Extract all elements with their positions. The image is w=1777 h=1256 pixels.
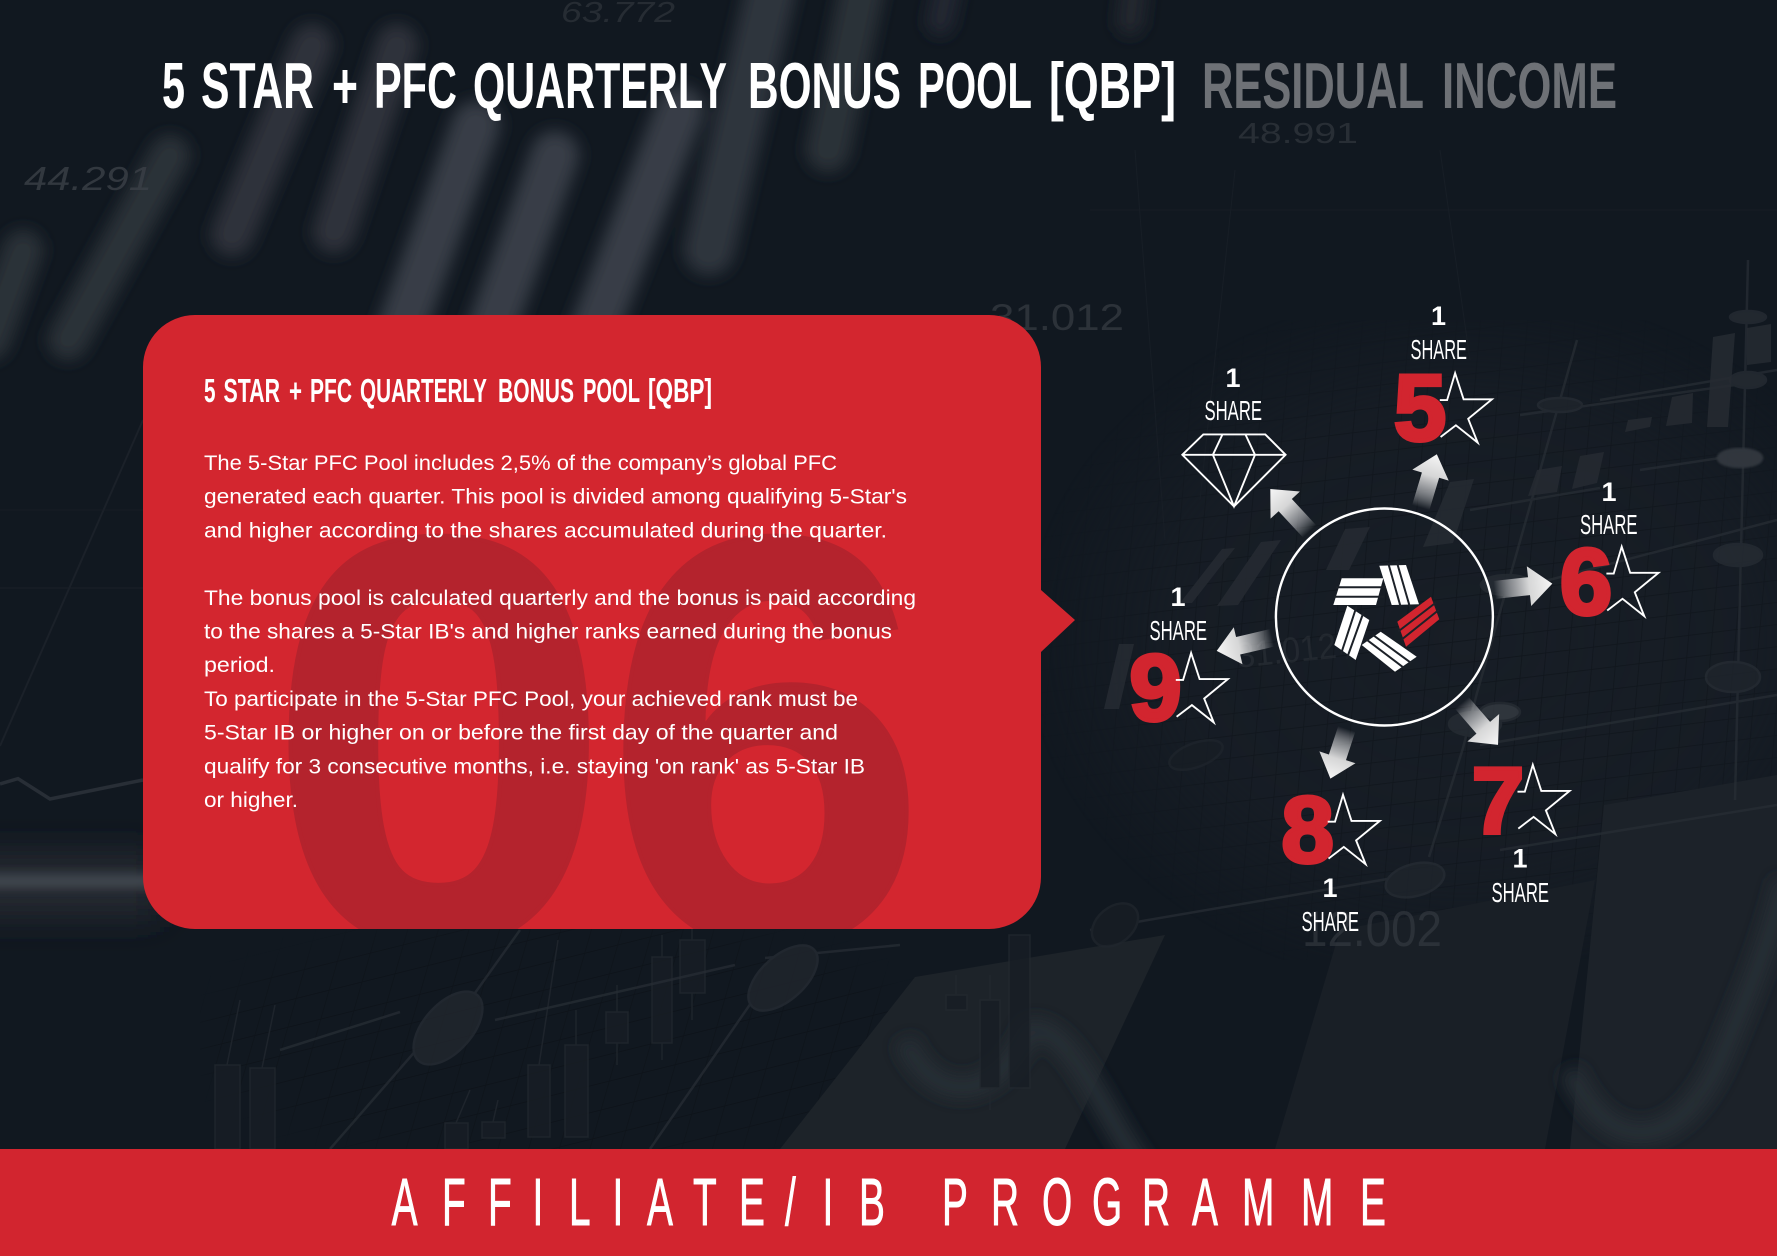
background: lower candlesticks bbox=[215, 915, 1030, 1149]
background: blurred candle bars bbox=[0, 0, 1134, 340]
background: chart lines and rings bbox=[0, 150, 1777, 1149]
panel body text: To participate in the 5-Star PFC Pool, your achieved rank must be bbox=[204, 688, 858, 711]
background: blurred wave bbox=[905, 880, 1777, 1170]
panel watermark number: 6 bbox=[604, 416, 928, 1066]
panel body text bbox=[204, 452, 916, 812]
panel heading: QUARTERLY bbox=[360, 372, 487, 409]
rank: 8 star 1 share: 8 bbox=[1281, 777, 1334, 882]
rank: 6 star 1 share: SHARE bbox=[1580, 509, 1638, 540]
rank: 9 star 1 share: 1 bbox=[1170, 582, 1186, 612]
background: left chart lines and glow bbox=[0, 420, 160, 915]
rank: 6 star 1 share bbox=[1560, 477, 1658, 634]
background: ghost numbers: 31.012 bbox=[1235, 625, 1338, 676]
panel heading: STAR bbox=[224, 372, 280, 409]
panel body text: qualify for 3 consecutive months, i.e. staying 'on rank' as 5-Star IB bbox=[204, 755, 865, 778]
title: PFC bbox=[374, 49, 457, 122]
arrow to 8 star bbox=[1312, 723, 1365, 785]
panel watermark number bbox=[288, 534, 909, 929]
rank: 9 star 1 share bbox=[1129, 582, 1228, 740]
rank: 7 star 1 share: SHARE bbox=[1492, 877, 1549, 908]
panel watermark number: 0 bbox=[266, 415, 612, 1066]
title: QUARTERLY bbox=[473, 49, 727, 122]
background: lower polygons bbox=[780, 775, 1777, 1149]
background: lower grid bbox=[200, 900, 960, 1150]
background: perspective candles bbox=[1104, 324, 1771, 709]
title: INCOME bbox=[1442, 49, 1617, 122]
background: ghost numbers: 12.002 bbox=[1302, 901, 1442, 957]
diagram: shares by rank bbox=[1129, 301, 1658, 937]
rank: diamond 1 share: SHARE bbox=[1204, 395, 1262, 426]
rank: 5 star 1 share: 5 bbox=[1394, 355, 1446, 460]
panel: bonus pool description bbox=[143, 315, 1075, 929]
rank: 5 star 1 share: SHARE bbox=[1410, 334, 1467, 365]
icon: diamond bbox=[1182, 434, 1286, 506]
rank: diamond 1 share: 1 bbox=[1225, 363, 1241, 393]
rank: 8 star 1 share bbox=[1281, 777, 1380, 937]
background: ghost numbers: 48.991 bbox=[1238, 118, 1358, 150]
arrow to 6 star bbox=[1492, 564, 1555, 610]
title: 5 bbox=[162, 49, 185, 122]
rank: 9 star 1 share: SHARE bbox=[1150, 615, 1207, 646]
background: ghost numbers bbox=[24, 0, 1442, 957]
rank: 5 star 1 share: 1 bbox=[1431, 301, 1446, 331]
background: ghost numbers: 31.012 bbox=[990, 297, 1124, 338]
title: STAR bbox=[201, 49, 314, 122]
rank: 7 star 1 share: 7 bbox=[1472, 748, 1524, 853]
background: ghost numbers: 44.291 bbox=[24, 160, 152, 197]
panel heading: BONUS bbox=[498, 372, 574, 409]
rank: 6 star 1 share: 6 bbox=[1560, 529, 1612, 634]
title: [QBP] bbox=[1049, 49, 1176, 122]
rank: diamond 1 share bbox=[1182, 363, 1286, 506]
rank: 8 star 1 share: SHARE bbox=[1302, 906, 1359, 937]
panel heading bbox=[204, 372, 712, 409]
background: perspective grid bbox=[1334, 530, 1595, 748]
rank: 7 star 1 share: 1 bbox=[1512, 844, 1528, 874]
background: lighter right area bbox=[1000, 320, 1777, 960]
panel body text: The 5-Star PFC Pool includes 2,5% of the company’s global PFC bbox=[204, 452, 837, 475]
rank: 8 star 1 share: 1 bbox=[1322, 873, 1338, 903]
title: RESIDUAL bbox=[1202, 49, 1424, 122]
panel body text: to the shares a 5-Star IB's and higher ranks earned during the bonus bbox=[204, 620, 892, 644]
panel body text: period. bbox=[204, 654, 275, 677]
footer text: AFFILIATE/IB PROGRAMME bbox=[392, 1164, 1386, 1240]
panel body text: 5-Star IB or higher on or before the first day of the quarter and bbox=[204, 722, 838, 745]
title bbox=[162, 49, 1617, 122]
panel heading: [QBP] bbox=[648, 372, 712, 409]
panel body text: or higher. bbox=[204, 789, 298, 812]
title: + bbox=[332, 49, 358, 122]
rank: 5 star 1 share bbox=[1394, 301, 1492, 460]
panel heading: PFC bbox=[310, 372, 352, 409]
title: POOL bbox=[918, 49, 1032, 122]
arrow to diamond bbox=[1256, 475, 1324, 545]
panel body text: and higher according to the shares accumulated during the quarter. bbox=[204, 519, 887, 542]
rank: 7 star 1 share bbox=[1472, 748, 1570, 908]
panel body text: generated each quarter. This pool is divided among qualifying 5-Star's bbox=[204, 486, 907, 509]
rank: 9 star 1 share: 9 bbox=[1129, 635, 1182, 740]
arrow to 7 star bbox=[1446, 689, 1514, 759]
rank: 6 star 1 share: 1 bbox=[1601, 477, 1617, 507]
panel heading: POOL bbox=[583, 372, 640, 409]
central circle bbox=[1276, 508, 1493, 726]
footer banner bbox=[0, 1149, 1777, 1256]
panel heading: 5 bbox=[204, 372, 216, 409]
arrow to 9 star bbox=[1212, 619, 1277, 669]
arrow to 5 star bbox=[1403, 449, 1455, 513]
panel heading: + bbox=[289, 372, 302, 409]
panel body text: The bonus pool is calculated quarterly and the bonus is paid according bbox=[204, 587, 916, 610]
title: BONUS bbox=[748, 49, 901, 122]
icon: company logo bbox=[1333, 563, 1439, 672]
